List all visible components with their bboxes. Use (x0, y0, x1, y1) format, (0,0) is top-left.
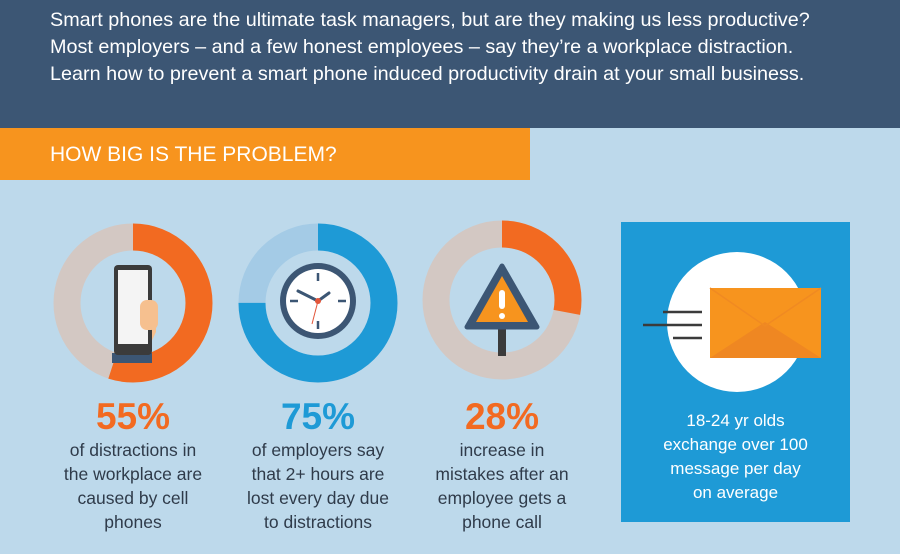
callout text: message per day (670, 459, 801, 478)
icon: clock (280, 263, 356, 339)
stat: 55% (64, 396, 202, 532)
stat: 75%: that 2+ hours are (252, 464, 384, 484)
donut: 28% mistakes (436, 234, 568, 366)
donut: 75% employers (252, 237, 384, 369)
stat: 28%: employee gets a (438, 488, 566, 508)
header intro text: Learn how to prevent a smart phone induced productivity drain at your small business. (50, 63, 804, 85)
icon: warning sign (467, 266, 537, 356)
stat: 55%: caused by cell (78, 488, 188, 508)
donut: 55% phones (67, 237, 199, 369)
stat: 75%: 75% (281, 396, 355, 437)
callout text: exchange over 100 (663, 435, 808, 454)
icon: envelope (643, 252, 822, 392)
stat: 75% (247, 396, 389, 532)
stat: 55%: the workplace are (64, 464, 202, 484)
callout text: on average (693, 483, 778, 502)
stat: 28%: increase in (460, 440, 544, 460)
stat: 75%: lost every day due (247, 488, 389, 508)
donut charts (54, 220, 582, 382)
stat: 28% (435, 396, 569, 532)
section heading: HOW BIG IS THE PROBLEM? (50, 143, 337, 166)
stat: 75%: of employers say (252, 440, 384, 460)
header intro text: Most employers – and a few honest employees – say they’re a workplace distraction. (50, 36, 793, 58)
stat: 28%: 28% (465, 396, 539, 437)
header intro text (0, 0, 900, 128)
icon: hand holding phone (112, 265, 158, 363)
callout text: 18-24 yr olds (686, 411, 785, 430)
section heading (0, 128, 530, 180)
stat: 75%: to distractions (264, 512, 372, 532)
stat: 55%: 55% (96, 396, 170, 437)
stat: 28%: phone call (462, 512, 542, 532)
stat: 55%: phones (104, 512, 162, 532)
callout text (663, 411, 808, 502)
stat: 28%: mistakes after an (435, 464, 569, 484)
stat: 55%: of distractions in (70, 440, 196, 460)
panel: messages callout (621, 222, 850, 522)
header intro text: Smart phones are the ultimate task managers, but are they making us less productive? (50, 9, 810, 31)
